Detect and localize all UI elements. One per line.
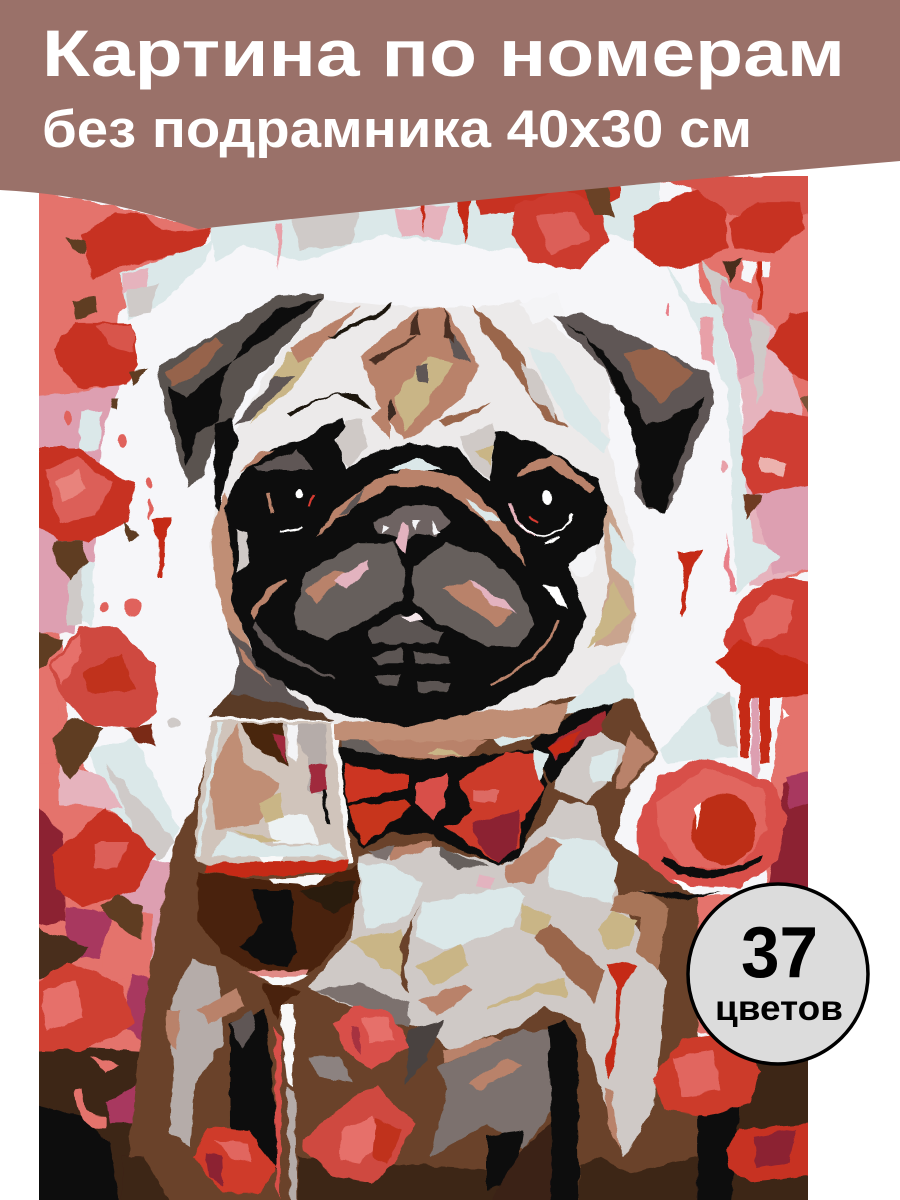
black mask: [226, 417, 607, 727]
chest: [308, 800, 669, 1157]
leaves and drips: right: [666, 258, 817, 719]
roses: right front: [637, 757, 817, 1182]
eyes: [268, 489, 572, 543]
muzzle: [294, 458, 535, 692]
title: Картина по номерам: [42, 16, 845, 90]
badge: 37 colors: цветов: [715, 989, 843, 1028]
leaves: left: [32, 238, 156, 940]
left leg: [123, 960, 698, 1200]
pug left ear: [157, 293, 324, 510]
pug body: [123, 683, 698, 1200]
right border with roses: [633, 176, 817, 1200]
header banner: [0, 0, 900, 229]
pug head: [157, 293, 714, 742]
roses: left: [32, 212, 212, 1051]
badge: 37 colors: 37: [741, 913, 818, 993]
roses: right upper: [633, 176, 817, 777]
badge: 37 colors: [688, 884, 868, 1064]
forehead: [235, 303, 609, 480]
head base: [209, 300, 635, 742]
drips: left: [63, 410, 181, 728]
subtitle: без подрамника 40х30 см: [42, 100, 752, 159]
bow tie: [337, 700, 616, 870]
roses: on body: [192, 1007, 416, 1193]
top centre background: [210, 182, 660, 270]
lower belly: [308, 960, 637, 1200]
pug right ear: [520, 293, 714, 513]
painting: [30, 170, 820, 1200]
left border with roses: [32, 189, 212, 1200]
wine glass: [194, 711, 358, 1200]
neck: [306, 704, 655, 804]
